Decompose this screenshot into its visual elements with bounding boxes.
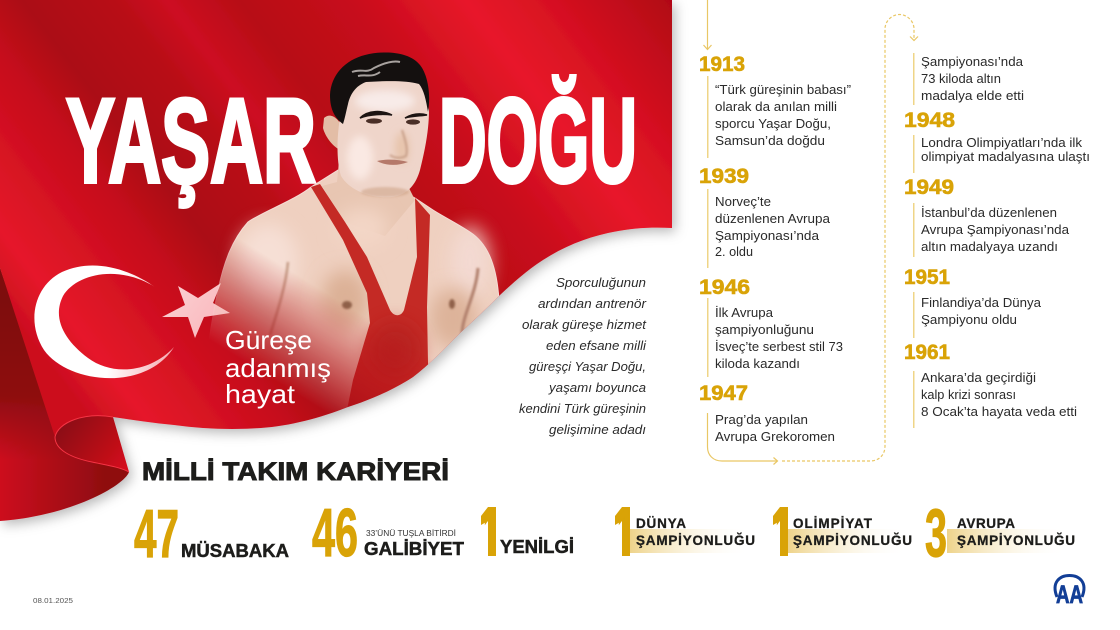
timeline 1939: Şampiyonası’nda [715, 228, 820, 243]
timeline 1947 continued: Şampiyonası’nda [921, 54, 1024, 69]
timeline 1948: olimpiyat madalyasına ulaştı [921, 149, 1090, 164]
timeline 1946: şampiyonluğunu [715, 322, 814, 337]
timeline 1939: Norveç’te [715, 194, 771, 209]
timeline 1948: 1948 [904, 109, 955, 132]
timeline 1939: 1939 [699, 165, 749, 188]
hair [330, 52, 429, 124]
timeline 1946: İlk Avrupa [715, 305, 774, 320]
stat: 3 european championships: ŞAMPİYONLUĞU [957, 533, 1075, 548]
timeline 1939: düzenlenen Avrupa [715, 211, 831, 226]
stat: 46 wins: 33’ÜNÜ TUŞLA BİTİRDİ [366, 529, 456, 538]
intro paragraph: olarak güreşe hizmet [522, 318, 647, 332]
stat: 47 bouts: MÜSABAKA [181, 541, 289, 561]
title: YAŞAR: YAŞAR [66, 74, 316, 208]
stat: 47 bouts: 47 [134, 496, 179, 572]
timeline 1947 continued [913, 53, 1024, 105]
stat: 46 wins: GALİBİYET [364, 539, 464, 559]
timeline 1951: Şampiyonu oldu [921, 312, 1017, 327]
timeline 1949: 1949 [904, 176, 954, 199]
timeline 1946 [699, 276, 843, 377]
intro paragraph: gelişimine adadı [549, 423, 646, 437]
timeline 1961: 8 Ocak’ta hayata veda etti [921, 404, 1077, 419]
stat: 1 olympic championship: ŞAMPİYONLUĞU [793, 533, 912, 548]
intro paragraph [519, 276, 647, 437]
intro paragraph: güreşçi Yaşar Doğu, [529, 360, 646, 374]
title: DOĞU: DOĞU [439, 74, 637, 208]
timeline 1913: Samsun’da doğdu [715, 133, 825, 148]
intro paragraph: yaşamı boyunca [548, 381, 646, 395]
timeline 1947 continued: 73 kiloda altın [921, 71, 1001, 86]
timeline 1961: Ankara’da geçirdiği [921, 370, 1036, 385]
heading: national team career: MİLLİ TAKIM KARİYERİ [142, 458, 449, 486]
stat: 1 world championship: 1 [617, 495, 634, 571]
logo: AA [1055, 576, 1084, 609]
timeline 1947 continued: madalya elde etti [921, 88, 1024, 103]
tagline [225, 325, 331, 409]
eyebrows [360, 112, 392, 118]
timeline 1913: “Türk güreşinin babası” [715, 82, 851, 97]
stat: 1 loss [481, 507, 574, 556]
timeline 1948 [904, 109, 1090, 173]
stat: 46 wins: 46 [312, 495, 358, 571]
mouth [377, 160, 408, 165]
icon: crescent [34, 265, 174, 378]
intro paragraph: eden efsane milli [546, 339, 647, 353]
stat: 1 olympic championship [773, 507, 912, 556]
stat: 1 world championship: ŞAMPİYONLUĞU [636, 533, 755, 548]
date: 08.01.2025 [33, 596, 73, 605]
timeline 1913: 1913 [699, 53, 745, 76]
logo: AA: AA [1056, 581, 1083, 609]
stat: 1 loss: 1 [483, 495, 500, 571]
timeline 1961: 1961 [904, 341, 950, 364]
tagline: adanmış [225, 353, 331, 383]
timeline 1951: 1951 [904, 266, 950, 289]
torso [205, 170, 500, 420]
timeline 1913: sporcu Yaşar Doğu, [715, 116, 831, 131]
timeline 1913 [699, 53, 851, 158]
stat: 1 olympic championship: OLİMPİYAT [793, 516, 873, 531]
intro paragraph: Sporculuğunun [556, 276, 646, 290]
timeline 1947: Prag’da yapılan [715, 412, 808, 427]
timeline 1946: 1946 [699, 276, 750, 299]
stat: 3 european championships: 3 [925, 495, 947, 571]
red flag banner [0, 0, 672, 521]
timeline 1949: İstanbul’da düzenlenen [921, 205, 1057, 220]
tagline: hayat [225, 379, 296, 409]
stat: 47 bouts [134, 496, 289, 572]
timeline arrow: start [704, 0, 712, 50]
timeline 1946: İsveç’te serbest stil 73 [715, 339, 843, 354]
stat: 3 european championships [925, 495, 1075, 571]
ear [323, 116, 342, 150]
timeline 1951: Finlandiya’da Dünya [921, 295, 1042, 310]
timeline 1947: Avrupa Grekoromen [715, 429, 835, 444]
timeline 1939 [699, 165, 831, 268]
timeline 1913: olarak da anılan milli [715, 99, 837, 114]
intro paragraph: ardından antrenör [538, 297, 647, 311]
neck [322, 164, 415, 234]
portrait of Yaşar Doğu [205, 150, 500, 420]
stat: 46 wins [312, 495, 464, 571]
face [338, 72, 429, 197]
timeline 1947: 1947 [699, 382, 748, 405]
stat: 1 world championship: DÜNYA [636, 516, 686, 531]
timeline 1949 [904, 176, 1070, 257]
timeline 1939: 2. oldu [715, 244, 753, 259]
timeline connector [708, 14, 918, 464]
timeline 1961 [904, 341, 1077, 428]
timeline 1961: kalp krizi sonrası [921, 387, 1016, 402]
timeline 1946: kiloda kazandı [715, 356, 800, 371]
timeline 1951 [904, 266, 1042, 338]
icon: star [162, 283, 230, 338]
red singlet [311, 184, 430, 420]
timeline 1948: Londra Olimpiyatları’nda ilk [921, 135, 1083, 150]
tagline: Güreşe [225, 325, 312, 355]
intro paragraph: kendini Türk güreşinin [519, 402, 646, 416]
timeline 1949: Avrupa Şampiyonası’nda [921, 222, 1070, 237]
stat: 1 loss: YENİLGİ [500, 537, 574, 557]
timeline 1949: altın madalyaya uzandı [921, 239, 1058, 254]
stat: 1 world championship [615, 507, 754, 556]
eyes [366, 118, 382, 124]
nose [390, 130, 407, 158]
nipples [342, 301, 352, 309]
portrait head [323, 52, 429, 197]
timeline 1947 [699, 382, 835, 444]
stat: 3 european championships: AVRUPA [957, 516, 1015, 531]
stat: 1 olympic championship: 1 [775, 495, 792, 571]
